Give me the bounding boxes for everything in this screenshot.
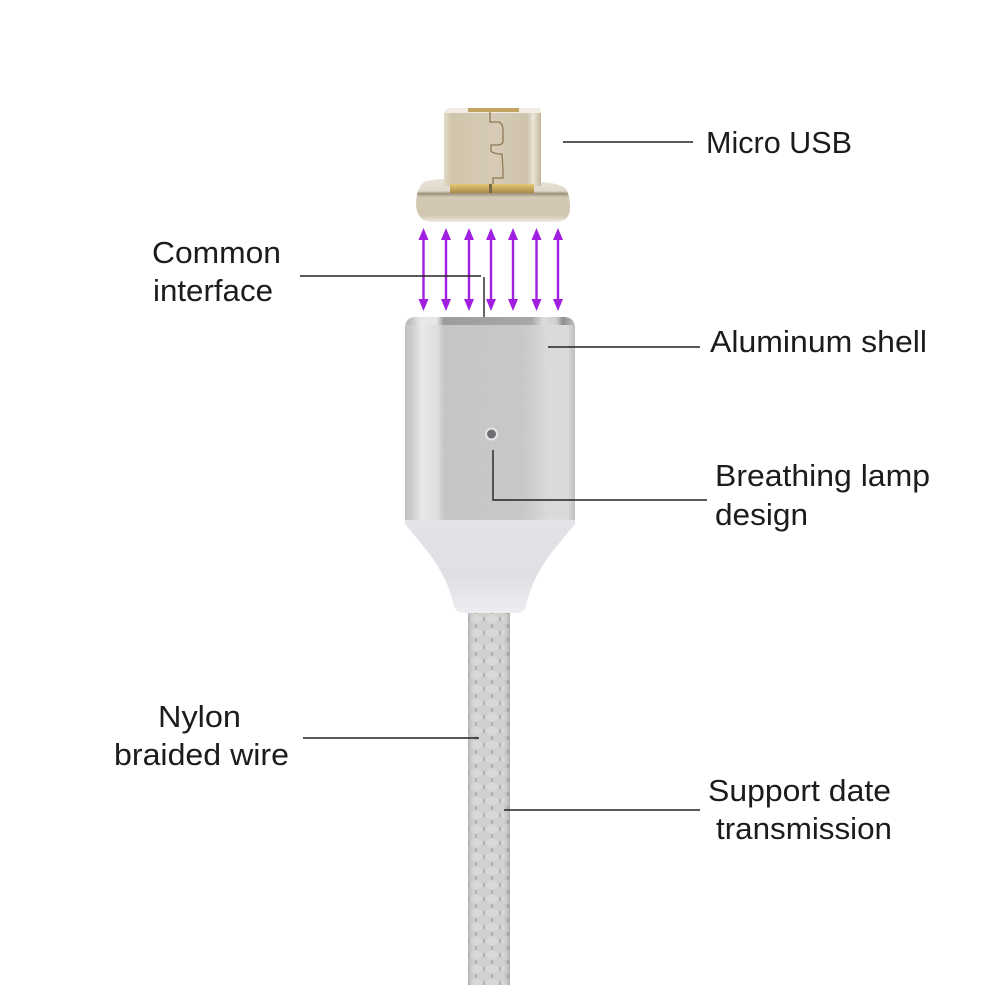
label: micro USB: Micro USB	[706, 125, 852, 160]
cable	[468, 610, 510, 985]
label: aluminum shell: Aluminum shell	[710, 324, 927, 359]
magnetic attraction arrows	[418, 228, 563, 311]
leader line: common interface	[300, 276, 484, 317]
connector base flange	[416, 179, 570, 222]
label: transmission: transmission	[716, 811, 892, 846]
braided wire	[468, 610, 510, 985]
breathing lamp dot	[485, 428, 498, 440]
micro USB connector	[416, 108, 570, 222]
label: braided wire: braided wire	[114, 737, 289, 772]
leader line: micro USB	[563, 141, 693, 143]
leader line: nylon braided wire	[303, 737, 479, 739]
leader line: breathing lamp	[493, 450, 707, 500]
label: breathing lamp: Breathing lamp	[715, 458, 930, 493]
connector plug body	[444, 108, 541, 186]
white collar	[405, 520, 575, 613]
label: common interface: Common	[152, 235, 281, 270]
aluminum shell	[405, 317, 575, 520]
leader line: data transmission	[504, 809, 700, 811]
label: nylon: Nylon	[158, 699, 241, 734]
label: common interface line 2: interface	[153, 273, 273, 308]
leader line: aluminum shell	[548, 346, 700, 348]
label: support date: Support date	[708, 773, 891, 808]
label: breathing lamp line 2: design	[715, 497, 808, 532]
